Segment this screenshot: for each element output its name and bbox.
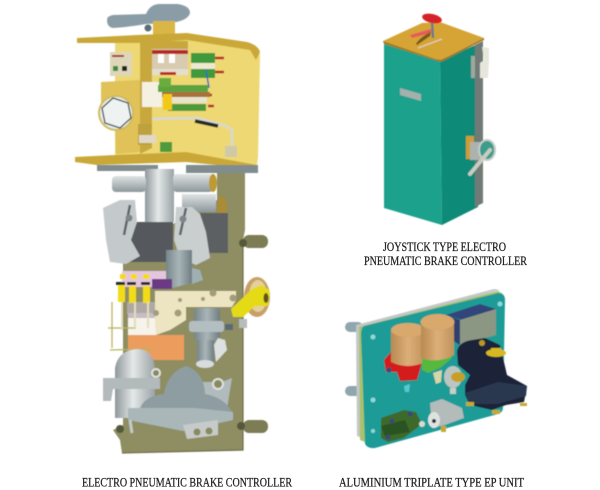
caption line 1: JOYSTICK TYPE ELECTRO: [383, 240, 506, 254]
brass fitting: [444, 366, 465, 394]
illustration: joystick type controller: [383, 12, 495, 225]
slot: [410, 29, 431, 38]
mounting flange: [97, 165, 258, 173]
cream arm plate: [155, 291, 236, 335]
terminal blocks: [152, 49, 188, 72]
tan solenoid right with green base: [404, 314, 454, 392]
silver fitting: [428, 399, 464, 432]
illustration: aluminium triplate EP unit: [345, 289, 527, 448]
right face: [440, 44, 478, 225]
blue and grey box: [446, 304, 496, 345]
mounting pins: [345, 322, 363, 396]
small solenoid valve: [189, 308, 233, 368]
yellow bracket: [75, 33, 260, 169]
caption: aluminium triplate EP unit: ALUMINIUM TRIPLATE TYPE EP UNIT: [339, 476, 524, 490]
tan solenoid left with red base: [384, 323, 425, 381]
left face: [384, 44, 442, 225]
caption: electro pneumatic brake controller: ELECTRO PNEUMATIC BRAKE CONTROLLER: [82, 476, 293, 490]
hinge: [480, 47, 489, 78]
yellow lever: [231, 277, 270, 328]
back layers: [356, 289, 500, 438]
side handle: [466, 136, 495, 174]
top handle: [107, 4, 190, 35]
hex bolt: [98, 95, 134, 131]
black valve: [457, 338, 527, 414]
lever with red knob: [432, 22, 433, 38]
caption: joystick type controller: [364, 240, 528, 268]
terminal strip: [108, 271, 184, 360]
illustration: electro pneumatic brake controller: [75, 4, 270, 453]
green valve block: [381, 410, 425, 442]
silver valve body: [103, 169, 228, 288]
back plate: [113, 172, 245, 453]
nameplate: [400, 88, 421, 101]
top cover: [383, 22, 484, 60]
lower silver assembly: [103, 349, 233, 439]
caption line 2: PNEUMATIC BRAKE CONTROLLER: [364, 254, 528, 268]
mounting studs: [243, 235, 268, 433]
side strip: [475, 41, 483, 207]
teal plate: [361, 293, 505, 448]
